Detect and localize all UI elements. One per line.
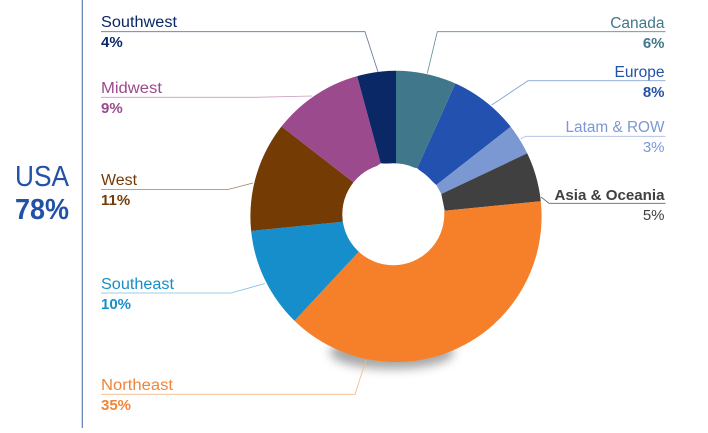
label: Asia and Oceania: 5% [643,207,664,224]
label: Asia and Oceania: Asia & Oceania [554,187,665,204]
divider line [82,0,83,428]
label: Southwest: Southwest [101,14,178,31]
donut chart [250,70,542,362]
label: West [101,172,253,209]
label: Northeast: Northeast [101,377,174,394]
label: Europe: Europe [615,64,664,81]
label: Europe: 8% [643,84,664,101]
slice: Canada [396,70,456,168]
label: West: 11% [101,192,130,209]
label: Latam and ROW: Latam & ROW [566,119,665,136]
slice: Europe [417,84,511,185]
label: Midwest: Midwest [101,80,163,97]
label: Europe [492,64,666,105]
label: Latam and ROW: 3% [643,139,664,156]
USA total [15,161,70,226]
label: Southeast [101,276,265,313]
label: Midwest [101,80,312,117]
donut shadow [330,335,454,369]
label: Canada [427,15,666,73]
slice: West [250,126,354,231]
label: Northeast: 35% [101,397,131,414]
label: Latam and ROW [521,119,666,156]
label: Southeast: Southeast [101,276,175,293]
label: Canada: 6% [643,35,664,52]
label: West: West [101,172,138,189]
label: Midwest: 9% [101,100,123,117]
label: Southeast: 10% [101,296,131,313]
donut hole [342,163,444,265]
label: Canada: Canada [610,15,665,32]
label: Asia and Oceania [541,187,666,224]
slice: Southeast [251,222,359,321]
slice: Latam and ROW [436,126,528,194]
slice: Northeast [294,201,542,362]
label: Southwest: 4% [101,34,123,51]
label: Northeast [101,360,366,414]
slice: Midwest [282,76,381,182]
USA total: 78% [15,194,69,226]
slice: Asia and Oceania [441,153,541,211]
USA total: USA [15,161,70,193]
label: Southwest [101,14,378,72]
slice: Southwest [357,70,396,164]
